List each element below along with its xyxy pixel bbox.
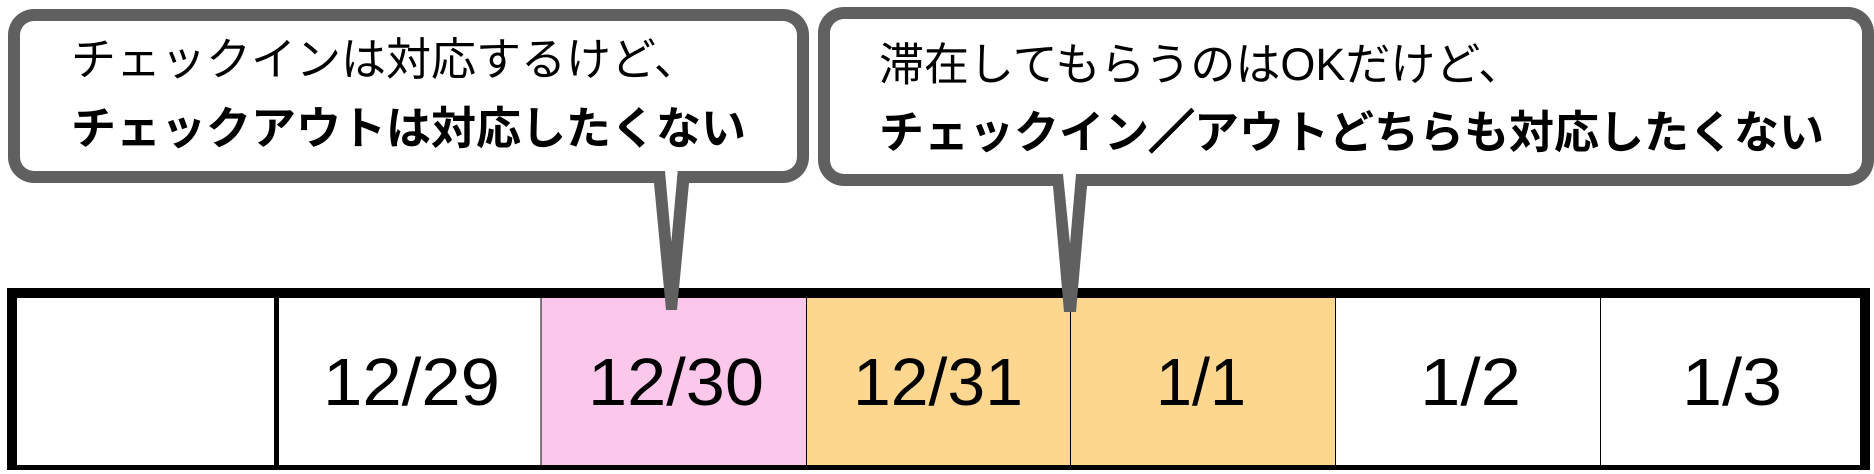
cell: 12/31 and 1/1 orange xyxy=(806,298,1336,465)
callout: check-out not supported, pointing at 12/30 xyxy=(8,9,809,310)
callout: neither check-in nor check-out, pointing at 12/31 and 1/1 xyxy=(818,7,1874,312)
calendar table xyxy=(7,288,1870,470)
callout text line 2 bold: チェックアウトは対応したくない xyxy=(71,103,746,154)
date: 1/3: 1/3 xyxy=(1682,345,1782,420)
date: 12/29: 12/29 xyxy=(323,345,500,420)
date: 1/1: 1/1 xyxy=(1156,345,1246,420)
callout text line 2 bold: チェックイン／アウトどちらも対応したくない xyxy=(879,107,1824,158)
date: 12/31: 12/31 xyxy=(853,345,1023,420)
date: 12/30: 12/30 xyxy=(588,345,764,420)
callout text line 1: チェックインは対応するけど、 xyxy=(71,34,699,85)
date: 1/2: 1/2 xyxy=(1420,345,1521,420)
callout text line 1: 滞在してもらうのはOKだけど、 xyxy=(879,39,1523,90)
cell: 12/30 pink xyxy=(541,298,806,465)
